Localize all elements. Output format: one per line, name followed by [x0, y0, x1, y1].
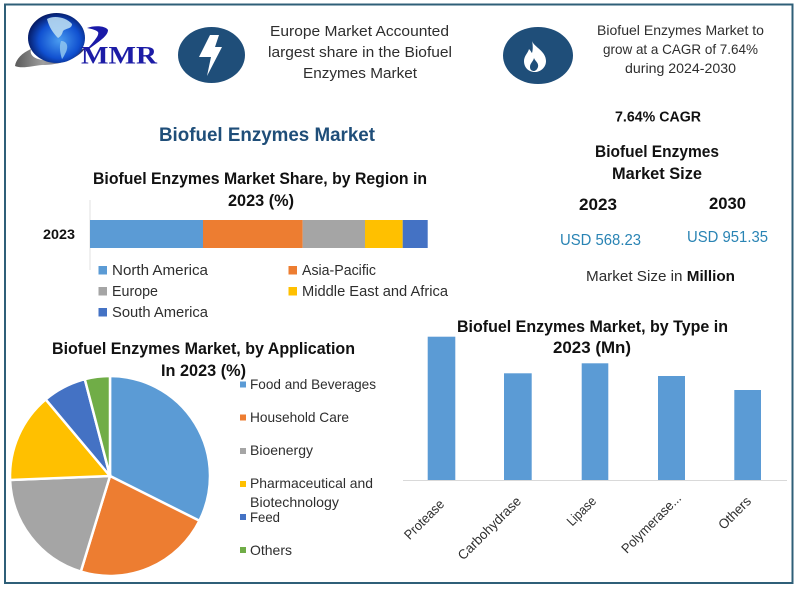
pie chart: [10, 376, 210, 576]
category axis labels: Lipase: [564, 494, 599, 529]
category axis labels: Protease: [401, 497, 447, 542]
chart heading: 2023 (Mn): [553, 339, 631, 357]
text: Europe market callout: Europe Market Accounted: [270, 24, 449, 40]
chart heading: Biofuel Enzymes Market Share, by Region in: [93, 170, 427, 188]
legend: applications: Biotechnology: [250, 494, 339, 510]
text: Europe market callout: largest share in the Biofuel: [268, 45, 452, 61]
legend: regions: Asia-Pacific: [302, 263, 376, 279]
legend: regions: South America: [112, 305, 209, 321]
text: CAGR callout: during 2024-2030: [625, 60, 736, 76]
market size heading: Biofuel Enzymes: [595, 143, 719, 161]
legend: applications: Pharmaceutical and: [250, 475, 373, 491]
legend: applications: Household Care: [250, 409, 349, 425]
category axis labels: Others: [715, 493, 754, 532]
text: Europe market callout: [268, 24, 452, 82]
legend: regions: North America: [112, 263, 209, 279]
legend: regions: Europe: [112, 284, 158, 300]
text: Europe market callout: Enzymes Market: [303, 66, 417, 82]
main title: Biofuel Enzymes Market: [159, 125, 376, 146]
market size heading: Market Size: [612, 165, 702, 183]
icon: flame: [503, 27, 573, 84]
year 2023 with value: 2023: [579, 195, 617, 214]
chart heading: In 2023 (%): [161, 362, 246, 380]
bar chart: [428, 337, 761, 480]
icon: lightning bolt: [178, 27, 245, 83]
panel: share by region: [43, 170, 449, 321]
panel: by application: [10, 340, 376, 576]
panel: market size: [560, 110, 768, 285]
year 2023 with value: USD 568.23: [560, 232, 641, 249]
year 2030 with value: USD 951.35: [687, 229, 768, 246]
logo: MMR globe: MMR: [81, 42, 158, 70]
chart heading: Biofuel Enzymes Market, by Application: [52, 340, 355, 358]
legend: applications: [240, 376, 376, 558]
text: CAGR callout: Biofuel Enzymes Market to: [597, 22, 764, 38]
legend: applications: Others: [250, 542, 292, 558]
year 2030 with value: 2030: [709, 194, 746, 213]
CAGR value: 7.64% CAGR: [615, 110, 702, 126]
year 2030 with value: [687, 194, 768, 246]
legend: applications: Bioenergy: [250, 442, 313, 458]
chart heading: [93, 170, 427, 210]
chart heading: [52, 340, 355, 380]
chart heading: 2023 (%): [228, 192, 294, 210]
legend: regions: Middle East and Africa: [302, 284, 449, 300]
chart heading: Biofuel Enzymes Market, by Type in: [457, 318, 728, 336]
unit note: Market Size in Million: [586, 269, 735, 285]
market size heading: [595, 143, 719, 183]
legend: applications: Feed: [250, 509, 280, 525]
legend: applications: Food and Beverages: [250, 376, 376, 392]
panel: by type: [401, 318, 787, 563]
year 2023 with value: [560, 195, 641, 249]
category axis labels: [401, 491, 754, 563]
text: CAGR callout: [597, 22, 764, 76]
chart heading: [457, 318, 728, 357]
category axis labels: Polymerase...: [618, 491, 684, 556]
category axis labels: Carbohydrase: [455, 494, 524, 563]
stacked bar chart: 2023: [43, 226, 75, 242]
stacked bar chart: [43, 220, 428, 248]
logo: MMR globe: [15, 13, 158, 70]
text: CAGR callout: grow at a CAGR of 7.64%: [603, 41, 758, 57]
legend: regions: [98, 263, 449, 321]
